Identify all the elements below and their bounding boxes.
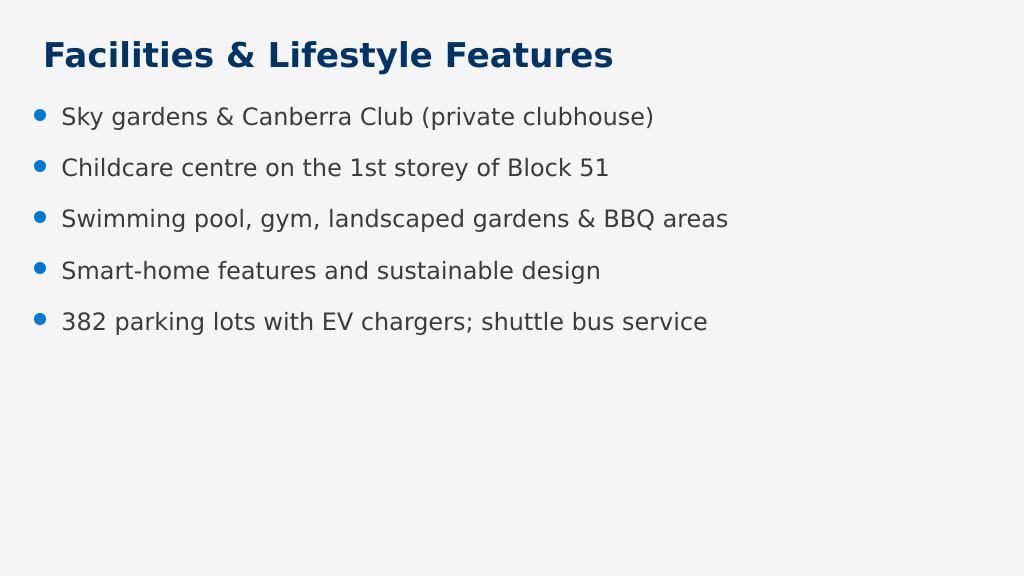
- text: smart home: Smart-home features and sustainable design: [61, 257, 601, 285]
- bullet: parking: [34, 313, 46, 325]
- text: childcare: Childcare centre on the 1st storey of Block 51: [61, 154, 610, 182]
- bullet: sky gardens: [34, 109, 46, 121]
- text: sky gardens: Sky gardens & Canberra Club (private clubhouse): [61, 103, 654, 131]
- bullet: smart home: [34, 262, 46, 274]
- bullet list: [34, 103, 728, 336]
- text: parking: 382 parking lots with EV chargers; shuttle bus service: [61, 308, 708, 336]
- text: pool: Swimming pool, gym, landscaped gardens & BBQ areas: [61, 205, 728, 233]
- title: Facilities & Lifestyle Features: [43, 36, 614, 76]
- bullet: childcare: [34, 160, 46, 172]
- bullet: pool: [34, 211, 46, 223]
